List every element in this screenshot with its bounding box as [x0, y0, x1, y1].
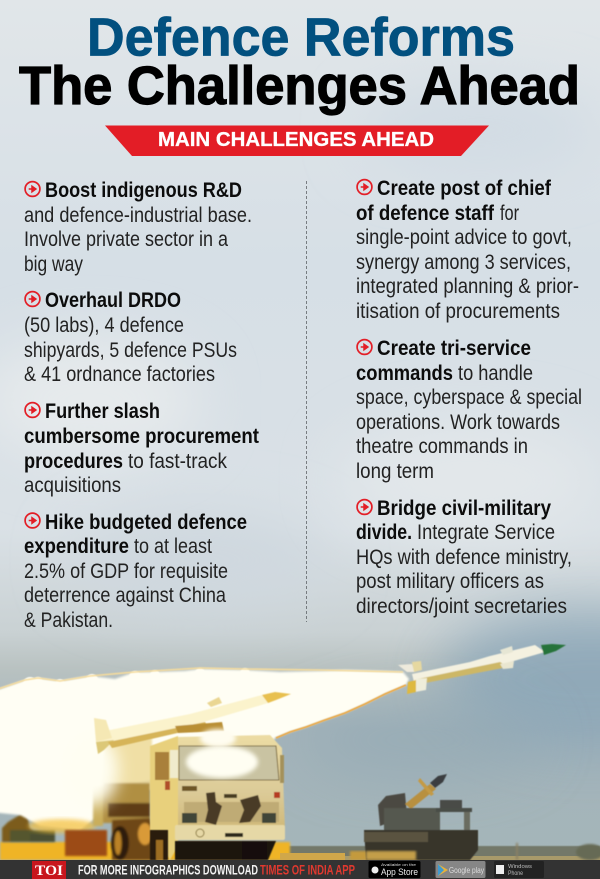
left item: Boost indigenous R&D: Boost indigenous R&D	[45, 178, 242, 202]
left item: Boost indigenous R&D: Involve private sector in a	[24, 227, 228, 251]
left item: Hike budgeted defence expenditure: deterrence against China	[24, 583, 226, 607]
left item: Further slash procedures	[24, 399, 259, 497]
photo: missile launch scene	[0, 644, 600, 860]
badge: Windows Phone: Phone	[508, 871, 524, 877]
red ribbon banner	[105, 126, 489, 156]
badge: Google play: Google play	[449, 866, 484, 875]
launcher missile	[94, 692, 291, 754]
left item: Hike budgeted defence expenditure: to at least	[134, 534, 212, 558]
badge: Windows Phone: Windows	[508, 864, 533, 870]
left item: Overhaul DRDO: shipyards, 5 defence PSUs	[24, 338, 237, 362]
column divider	[306, 181, 308, 622]
badge: Windows Phone	[494, 861, 544, 878]
left item: Hike budgeted defence expenditure: & Pakistan.	[24, 608, 113, 632]
right item: Bridge civil-military divide	[356, 496, 572, 618]
flame plume	[0, 668, 409, 833]
flatbed and rear of truck	[65, 738, 158, 860]
flame puffs	[23, 668, 250, 691]
right item: Create post of chief of defence staff: itisation of procurements	[356, 299, 560, 323]
underside and wheels	[150, 830, 276, 860]
right item: Create post of chief of defence staff: of defence staff	[356, 201, 495, 225]
launcher vehicle right	[364, 774, 478, 860]
left item: Overhaul DRDO: (50 labs), 4 defence	[24, 313, 184, 337]
right item: Bridge civil-military divide: divide.	[356, 520, 412, 544]
title line 2: The Challenges Ahead	[19, 56, 580, 116]
title line 1: Defence Reforms	[87, 8, 515, 68]
TOI logo: TOI	[35, 863, 63, 879]
right item: Create tri-service commands: commands	[356, 361, 453, 385]
upper missile in flight	[398, 644, 566, 694]
footer app name: TIMES OF INDIA APP	[260, 862, 355, 878]
footer bar	[0, 860, 600, 879]
left item: Further slash procedures: acquisitions	[24, 473, 121, 497]
right item: Create tri-service commands	[356, 336, 582, 483]
badge: Google play	[436, 861, 486, 878]
cab side and front	[150, 729, 285, 860]
icon: red arrow bullet	[25, 182, 40, 196]
right item: Create tri-service commands: long term	[356, 459, 434, 483]
left item: Boost indigenous R&D: and defence-industrial base.	[24, 203, 252, 227]
icon: red arrow bullet	[357, 500, 372, 514]
left item: Overhaul DRDO: Overhaul DRDO	[45, 288, 181, 312]
right item: Bridge civil-military divide: directors/joint secretaries	[356, 594, 567, 618]
icon: red arrow bullet	[357, 340, 372, 354]
badge: App Store: Available on the	[381, 862, 417, 867]
right item: Create post of chief of defence staff	[356, 176, 579, 323]
left item: Overhaul DRDO	[24, 288, 237, 386]
badge: App Store	[368, 861, 420, 878]
right item: Create tri-service commands: Create tri-service	[377, 336, 531, 360]
left item: Further slash procedures: Further slash	[45, 399, 160, 423]
left item: Hike budgeted defence expenditure: expenditure	[24, 534, 129, 558]
right item: Create tri-service commands: to handle	[458, 361, 533, 385]
red ribbon banner: MAIN CHALLENGES AHEAD	[158, 129, 434, 151]
left item: Boost indigenous R&D: big way	[24, 252, 83, 276]
icon: red arrow bullet	[25, 292, 40, 306]
left item: Further slash procedures: cumbersome procurement	[24, 424, 259, 448]
left item: Hike budgeted defence expenditure	[24, 510, 247, 632]
title	[19, 8, 580, 116]
left item: Hike budgeted defence expenditure: Hike budgeted defence	[45, 510, 247, 534]
left item: Hike budgeted defence expenditure: 2.5% of GDP for requisite	[24, 559, 228, 583]
icon: red arrow bullet	[357, 180, 372, 194]
icon: red arrow bullet	[25, 403, 40, 417]
icon: red arrow bullet	[25, 513, 40, 528]
right item: Create tri-service commands: operations. Work towards	[356, 410, 560, 434]
ground	[0, 842, 600, 860]
left item: Further slash procedures: procedures	[24, 449, 123, 473]
right item: Bridge civil-military divide: Bridge civil-military	[377, 496, 551, 520]
right item: Create post of chief of defence staff: Create post of chief	[377, 176, 552, 200]
bush right	[516, 843, 600, 860]
left item: Further slash procedures: to fast-track	[128, 449, 227, 473]
right item: Bridge civil-military divide: post military officers as	[356, 569, 544, 593]
right item: Bridge civil-military divide: Integrate Service	[417, 520, 555, 544]
right item: Create tri-service commands: theatre commands in	[356, 434, 528, 458]
flame glow over truck rear	[66, 734, 118, 806]
right item: Create post of chief of defence staff: for	[500, 201, 519, 225]
footer text: FOR MORE INFOGRAPHICS DOWNLOAD	[78, 862, 258, 878]
left item: Boost indigenous R&D	[24, 178, 252, 276]
truck	[65, 692, 291, 860]
distant vehicle left	[2, 811, 55, 842]
badge: App Store: App Store	[381, 867, 418, 877]
left item: Overhaul DRDO: & 41 ordnance factories	[24, 362, 215, 386]
